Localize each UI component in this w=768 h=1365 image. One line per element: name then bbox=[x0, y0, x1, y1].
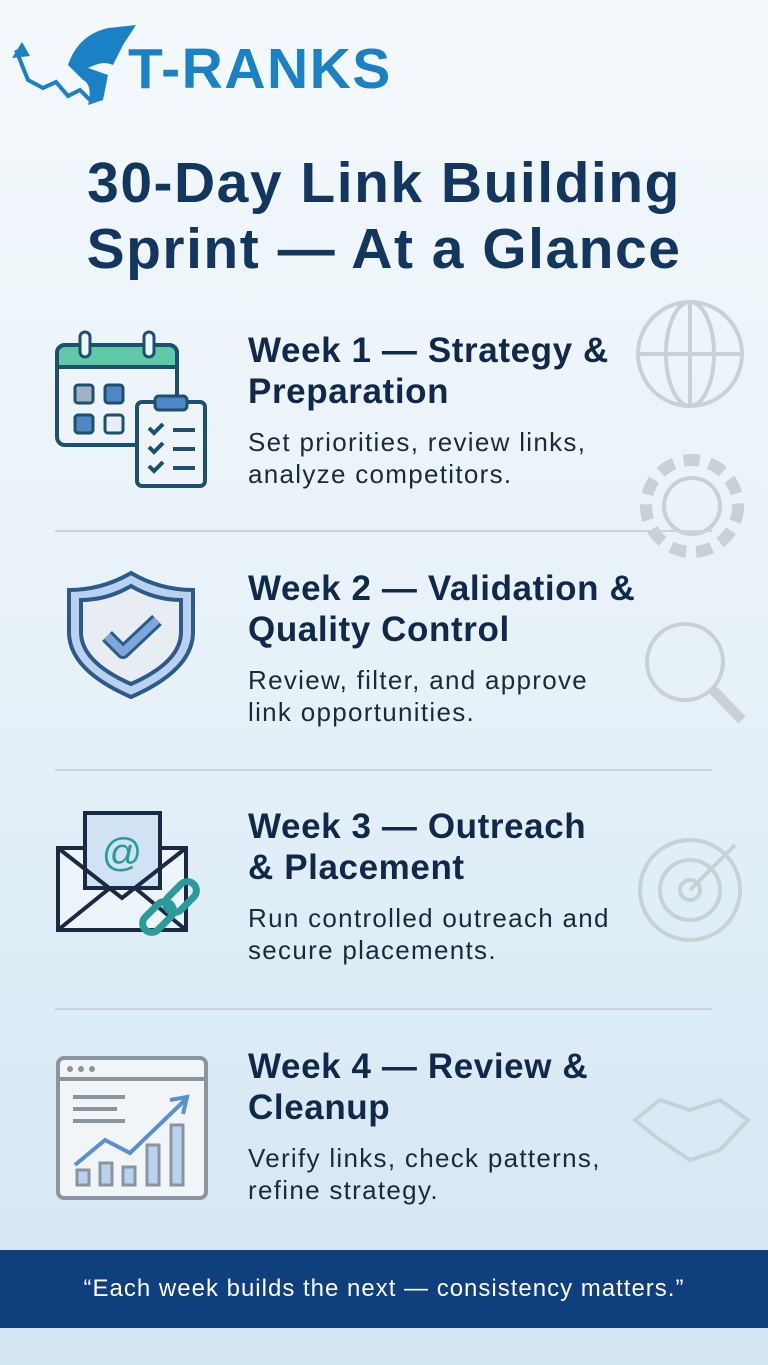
week 1 text: Week 1 — Strategy & bbox=[248, 331, 609, 370]
week 4 icon: analytics window bbox=[56, 1056, 208, 1200]
week 3 icon: envelope & link: @ bbox=[102, 831, 142, 875]
week 4 text: refine strategy. bbox=[248, 1175, 439, 1205]
week 1 text: Set priorities, review links, bbox=[248, 427, 586, 457]
week 1 text bbox=[248, 331, 609, 489]
week 2 text: Week 2 — Validation & bbox=[248, 569, 635, 608]
week 2 text: Quality Control bbox=[248, 610, 510, 649]
week 3 text: & Placement bbox=[248, 848, 465, 887]
week 3 text: secure placements. bbox=[248, 935, 497, 965]
week 4 text: Week 4 — Review & bbox=[248, 1047, 588, 1086]
week 3 text: Run controlled outreach and bbox=[248, 903, 610, 933]
week 4 text: Verify links, check patterns, bbox=[248, 1143, 601, 1173]
week 2 text bbox=[248, 569, 635, 727]
week 4 text: Cleanup bbox=[248, 1088, 390, 1127]
logo: T-RANKS bbox=[128, 37, 392, 101]
title: 30-Day Link Building bbox=[87, 151, 681, 215]
week 3 text: Week 3 — Outreach bbox=[248, 807, 586, 846]
week 2 text: link opportunities. bbox=[248, 697, 475, 727]
week 2 icon: shield bbox=[67, 570, 195, 700]
week 4 text bbox=[248, 1047, 601, 1205]
week 2 text: Review, filter, and approve bbox=[248, 665, 588, 695]
decorative background icons bbox=[632, 300, 751, 1162]
week 1 text: Preparation bbox=[248, 372, 449, 411]
footer quote band bbox=[0, 1250, 768, 1328]
week 1 text: analyze competitors. bbox=[248, 459, 512, 489]
title bbox=[87, 151, 681, 281]
week 1 icon: calendar & clipboard bbox=[55, 330, 207, 488]
week 3 text bbox=[248, 807, 610, 965]
week 3 icon: envelope & link bbox=[56, 811, 200, 936]
logo bbox=[12, 25, 392, 105]
footer quote band: “Each week builds the next — consistency matters.” bbox=[84, 1275, 684, 1302]
title: Sprint — At a Glance bbox=[87, 217, 681, 281]
